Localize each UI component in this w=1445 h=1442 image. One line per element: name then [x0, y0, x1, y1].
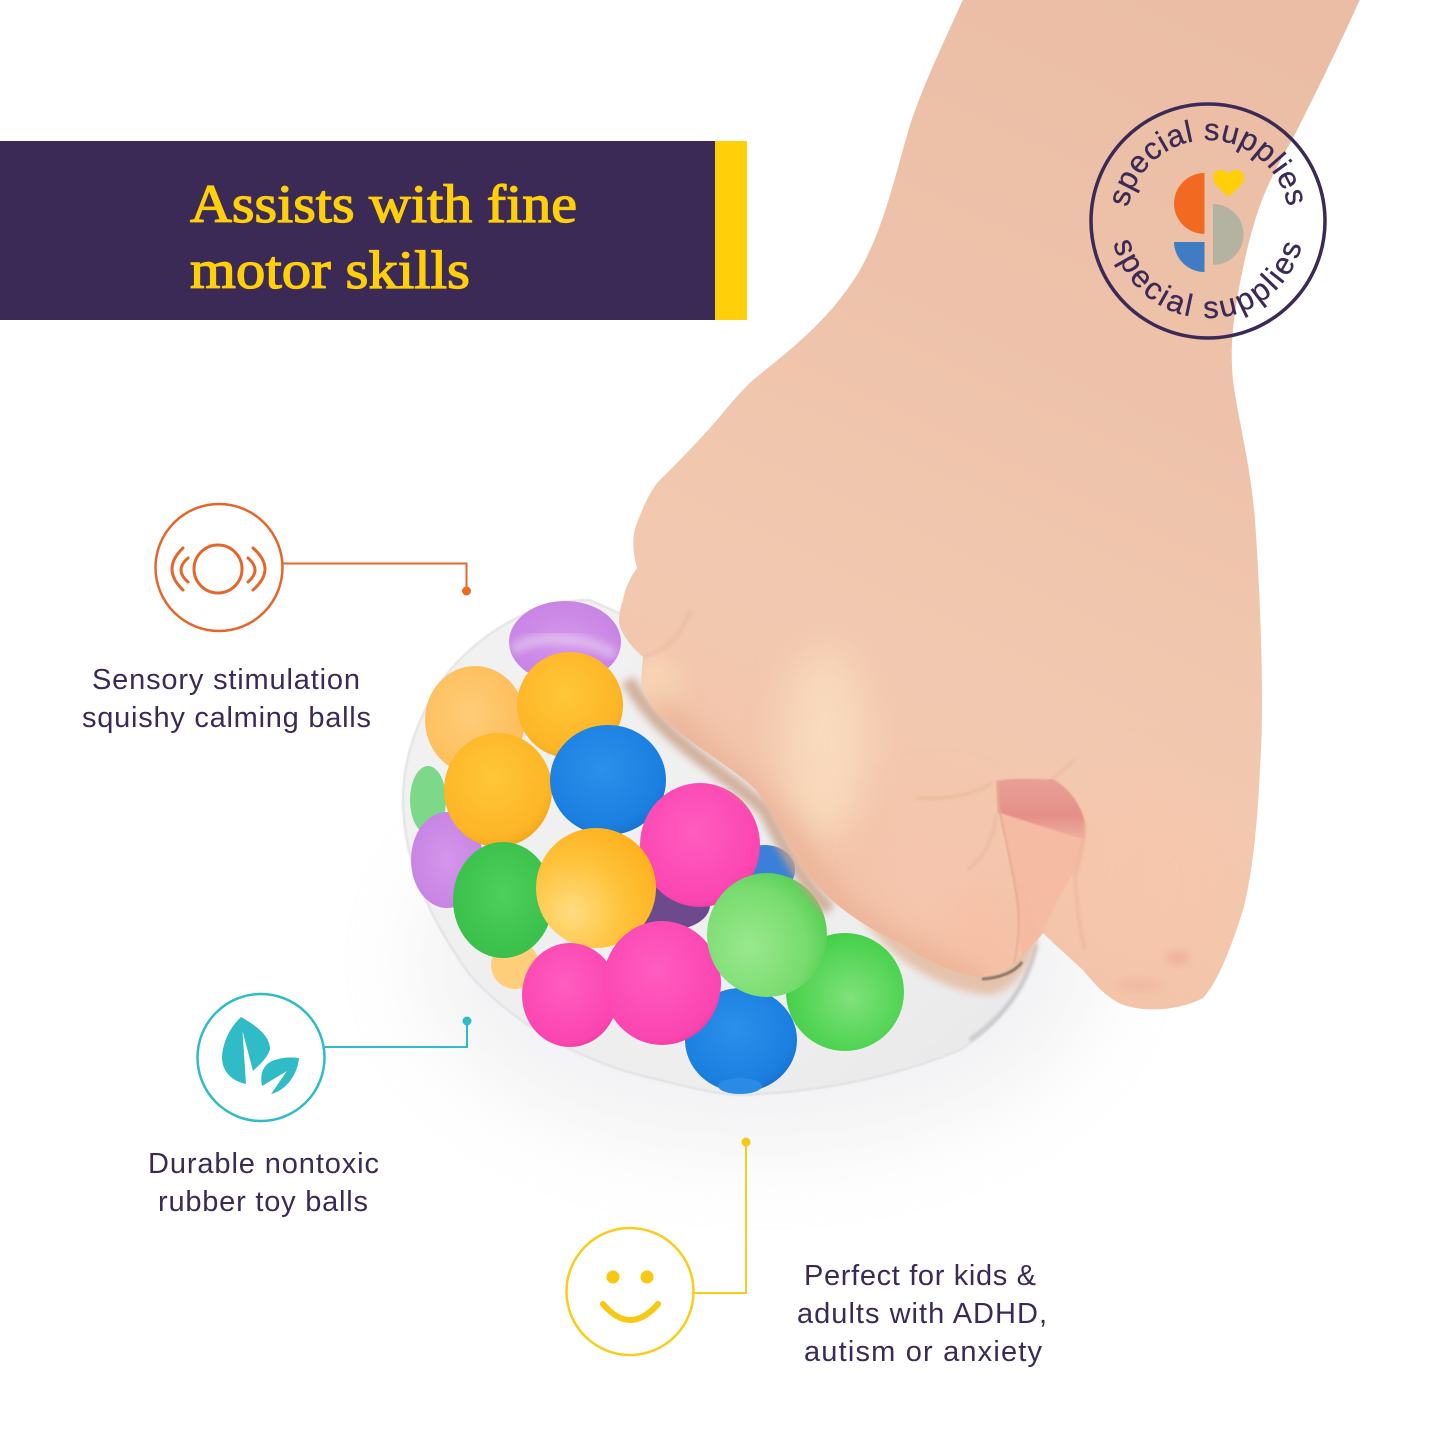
icon: sensory vibration [156, 504, 282, 631]
logo badge: special supplies [1089, 102, 1327, 340]
text: perfect for kids: Perfect for kids & [804, 1260, 1036, 1292]
text: durable nontoxic: Durable nontoxic [148, 1148, 379, 1180]
connector: smiley [694, 1138, 750, 1293]
hand shading [630, 610, 1240, 991]
logo mark [1174, 170, 1244, 272]
heading: motor skills [190, 240, 470, 300]
thumb lower skin tone [945, 880, 1016, 968]
icon: smiley [566, 1228, 694, 1355]
text: perfect for kids: autism or anxiety [804, 1336, 1042, 1368]
right knuckle edge [1074, 866, 1085, 948]
bag fold under thumb [982, 962, 1022, 979]
clear bag [403, 600, 1037, 1095]
text: sensory stimulation: squishy calming balls [82, 702, 371, 734]
shadow under toy [420, 770, 1100, 1150]
connector: sensory [283, 564, 471, 596]
title banner [0, 141, 747, 320]
front beads [444, 652, 904, 1094]
knuckle crease [646, 621, 686, 656]
heading: Assists with fine [190, 174, 577, 234]
bag rim highlight [970, 945, 1036, 1040]
badge text top: special supplies [1113, 120, 1303, 206]
skin spots [1166, 951, 1190, 965]
connector: leaves [325, 1016, 472, 1047]
product photo: squeezed stress ball with coloured beads [403, 600, 1037, 1095]
thumb side fold [997, 781, 1019, 965]
skin seen through bag under palm [850, 900, 1037, 995]
back beads [410, 601, 795, 989]
badge text bottom: special supplies [1114, 240, 1301, 318]
curled finger [1001, 813, 1082, 948]
icon: leaves [198, 994, 324, 1121]
text: sensory stimulation: Sensory stimulation [92, 664, 360, 696]
text: durable nontoxic: rubber toy balls [158, 1186, 368, 1218]
text: perfect for kids: adults with ADHD, [797, 1298, 1047, 1330]
product photo: hand [619, 0, 1362, 1009]
pink gap inside fist [997, 779, 1085, 840]
skin seen through bag beside knuckles [628, 680, 830, 910]
